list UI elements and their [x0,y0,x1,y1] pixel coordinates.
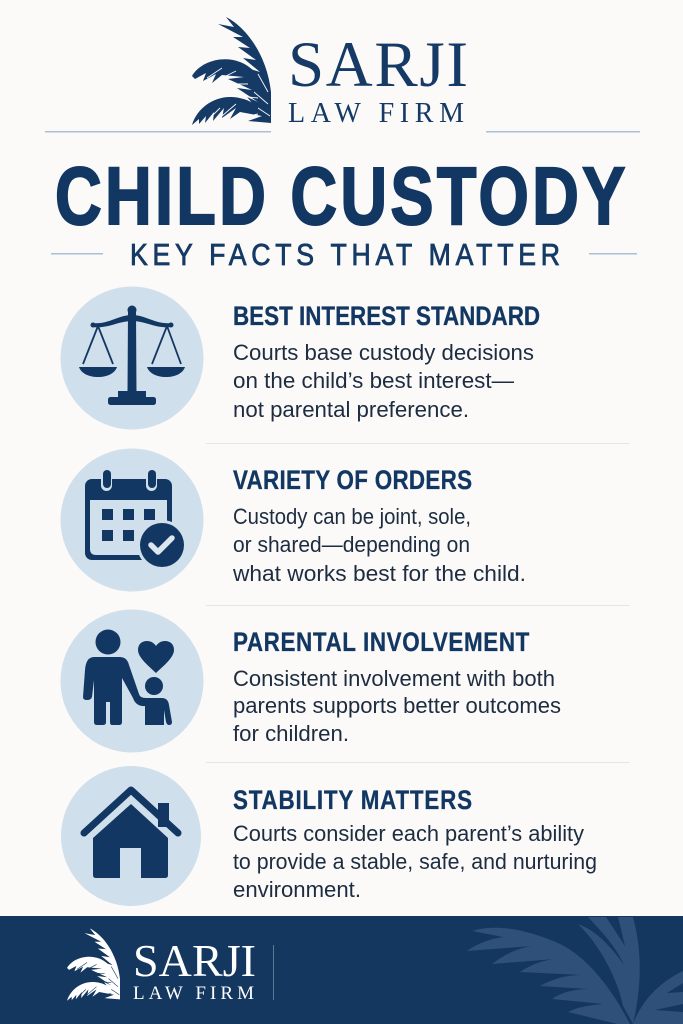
subtitle: KEY FACTS THAT MATTER [130,238,560,273]
body text: what works best for the child. [232,561,526,586]
icon: house [61,766,201,906]
panel: stability matters [61,766,597,906]
body text: not parental preference. [233,397,469,422]
panel: parental involvement [60,610,561,752]
icon: scales of justice [60,286,204,430]
body text: or shared—depending on [233,532,470,557]
watermark palm [467,917,683,1024]
heading: STABILITY MATTERS [233,786,472,816]
icon: palm fronds [192,17,271,125]
body text: parents supports better outcomes [233,693,561,718]
logo subtitle: LAW FIRM [288,98,464,129]
footer logo subtitle: LAW FIRM [133,983,254,1004]
title: CHILD CUSTODY [55,150,625,242]
logo name: SARJI [288,29,468,101]
footer logo name: SARJI [133,935,256,986]
panel: best interest standard [60,286,540,430]
body text: for children. [233,721,349,746]
panel: variety of orders [60,448,526,592]
body text: Consistent involvement with both [233,666,555,691]
body text: Courts base custody decisions [233,340,534,365]
icon: parent and child with heart [60,610,204,752]
icon: calendar with check [60,448,204,592]
footer band [0,916,683,1024]
heading: PARENTAL INVOLVEMENT [233,628,529,658]
body text: to provide a stable, safe, and nurturing [233,849,597,874]
heading: VARIETY OF ORDERS [233,466,472,496]
body text: on the child’s best interest— [233,368,514,393]
footer logo [67,928,256,1004]
body text: environment. [233,877,361,902]
body text: Custody can be joint, sole, [233,504,471,529]
heading: BEST INTEREST STANDARD [233,302,540,332]
icon: white palm [67,928,120,1001]
header logo [192,17,468,129]
body text: Courts consider each parent’s ability [233,821,584,846]
